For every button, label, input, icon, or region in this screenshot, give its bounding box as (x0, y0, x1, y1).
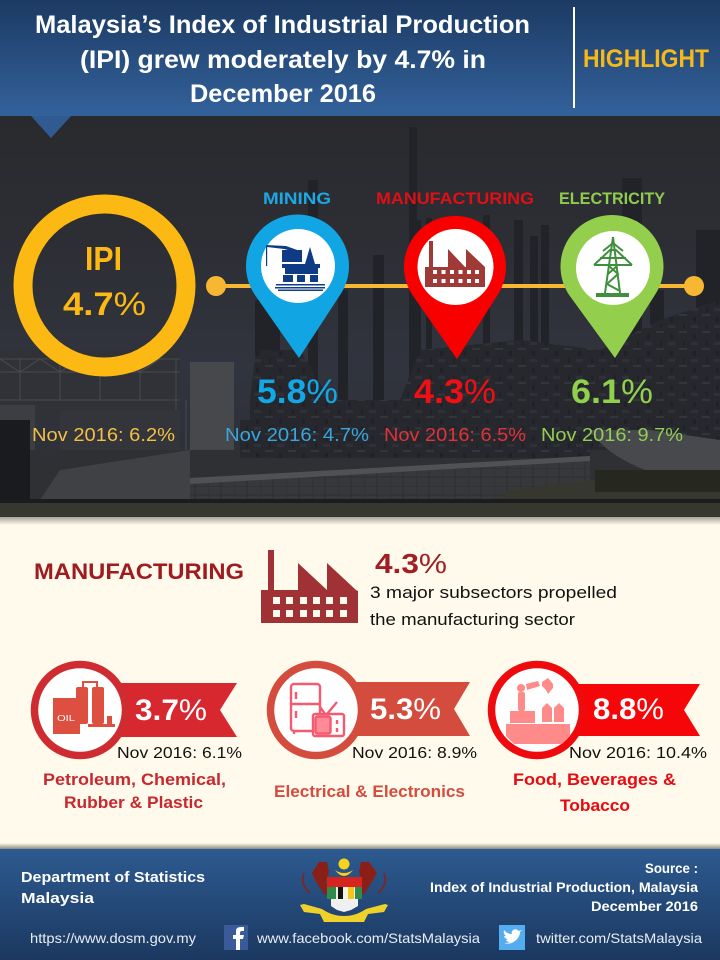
panel: electricity: ELECTRICITY (559, 189, 666, 208)
facebook link: www.facebook.com/StatsMalaysia (256, 930, 480, 946)
panel: petroleum subsector: Rubber & Plastic (64, 793, 203, 812)
cream section top shadow (0, 517, 720, 525)
website: https://www.dosm.gov.my (30, 930, 196, 946)
source: Source : (645, 860, 698, 876)
icon: fridge and TV (291, 684, 344, 736)
source: December 2016 (591, 898, 698, 914)
panel: food subsector: 8.8% (593, 693, 664, 726)
panel: manufacturing: MANUFACTURING (376, 189, 534, 208)
panel: manufacturing (376, 189, 534, 445)
panel: food subsector (492, 664, 707, 815)
panel: food subsector: Tobacco (560, 796, 630, 815)
panel: footer (0, 849, 720, 960)
panel: electricity: Nov 2016: 9.7% (541, 425, 683, 445)
icon: coat of arms (300, 858, 388, 922)
panel: mining: 5.8% (257, 373, 338, 411)
panel: refinery photo background (0, 116, 720, 517)
source: Index of Industrial Production, Malaysia (430, 879, 698, 895)
icon: oil barrel and tanks (53, 681, 115, 734)
text: manufacturing summary: 4.3% (375, 548, 447, 579)
icon: bottling robot (506, 678, 570, 744)
panel: mining: Nov 2016: 4.7% (225, 425, 369, 445)
icon: twitter (499, 925, 525, 950)
panel: electricity: 6.1% (571, 373, 653, 411)
title: (IPI) grew moderately by 4.7% in (80, 46, 486, 74)
panel: electrical subsector: 5.3% (370, 693, 441, 726)
text: manufacturing summary (370, 548, 617, 629)
connector line (206, 276, 704, 296)
panel: electrical subsector: Electrical & Electronics (274, 782, 465, 801)
title: December 2016 (190, 80, 376, 108)
panel: petroleum subsector: Nov 2016: 6.1% (117, 745, 242, 762)
panel: IPI ring: IPI (85, 240, 122, 277)
footer top shadow (0, 843, 720, 849)
header pointer (31, 116, 71, 138)
icon: facebook (224, 925, 248, 950)
text: manufacturing summary: the manufacturing sector (370, 610, 575, 629)
department name (21, 869, 205, 907)
panel: petroleum subsector: 3.7% (135, 694, 207, 727)
panel: food subsector: Food, Beverages & (513, 770, 676, 789)
panel: manufacturing: Nov 2016: 6.5% (384, 425, 526, 445)
title: Malaysia’s Index of Industrial Production (35, 11, 530, 39)
icon: mining pin (246, 215, 349, 358)
twitter link: twitter.com/StatsMalaysia (536, 930, 702, 946)
title (35, 11, 530, 108)
heading: manufacturing: MANUFACTURING (34, 559, 244, 584)
panel: electrical subsector: Nov 2016: 8.9% (352, 745, 477, 762)
panel: IPI ring: 4.7% (63, 286, 146, 322)
icon: electricity pin (560, 215, 664, 358)
panel: manufacturing: 4.3% (414, 373, 496, 411)
panel: mining (225, 189, 369, 445)
text: manufacturing summary: 3 major subsectors propelled (370, 583, 617, 602)
highlight label: HIGHLIGHT (583, 45, 709, 73)
panel: petroleum subsector: OIL (57, 713, 75, 723)
panel: petroleum subsector (34, 664, 242, 812)
panel: electrical subsector (270, 664, 477, 801)
panel: food subsector: Nov 2016: 10.4% (569, 745, 707, 762)
panel: petroleum subsector: Petroleum, Chemical, (43, 770, 226, 789)
panel: IPI ring (23, 204, 186, 445)
department name: Malaysia (21, 890, 95, 907)
panel: mining: MINING (263, 189, 331, 208)
panel: IPI ring: Nov 2016: 6.2% (32, 425, 175, 445)
department name: Department of Statistics (21, 869, 205, 886)
panel: electricity (541, 189, 683, 445)
source (430, 860, 698, 914)
panel: header (0, 0, 720, 138)
icon: factory (261, 550, 358, 623)
icon: manufacturing pin (404, 216, 506, 359)
